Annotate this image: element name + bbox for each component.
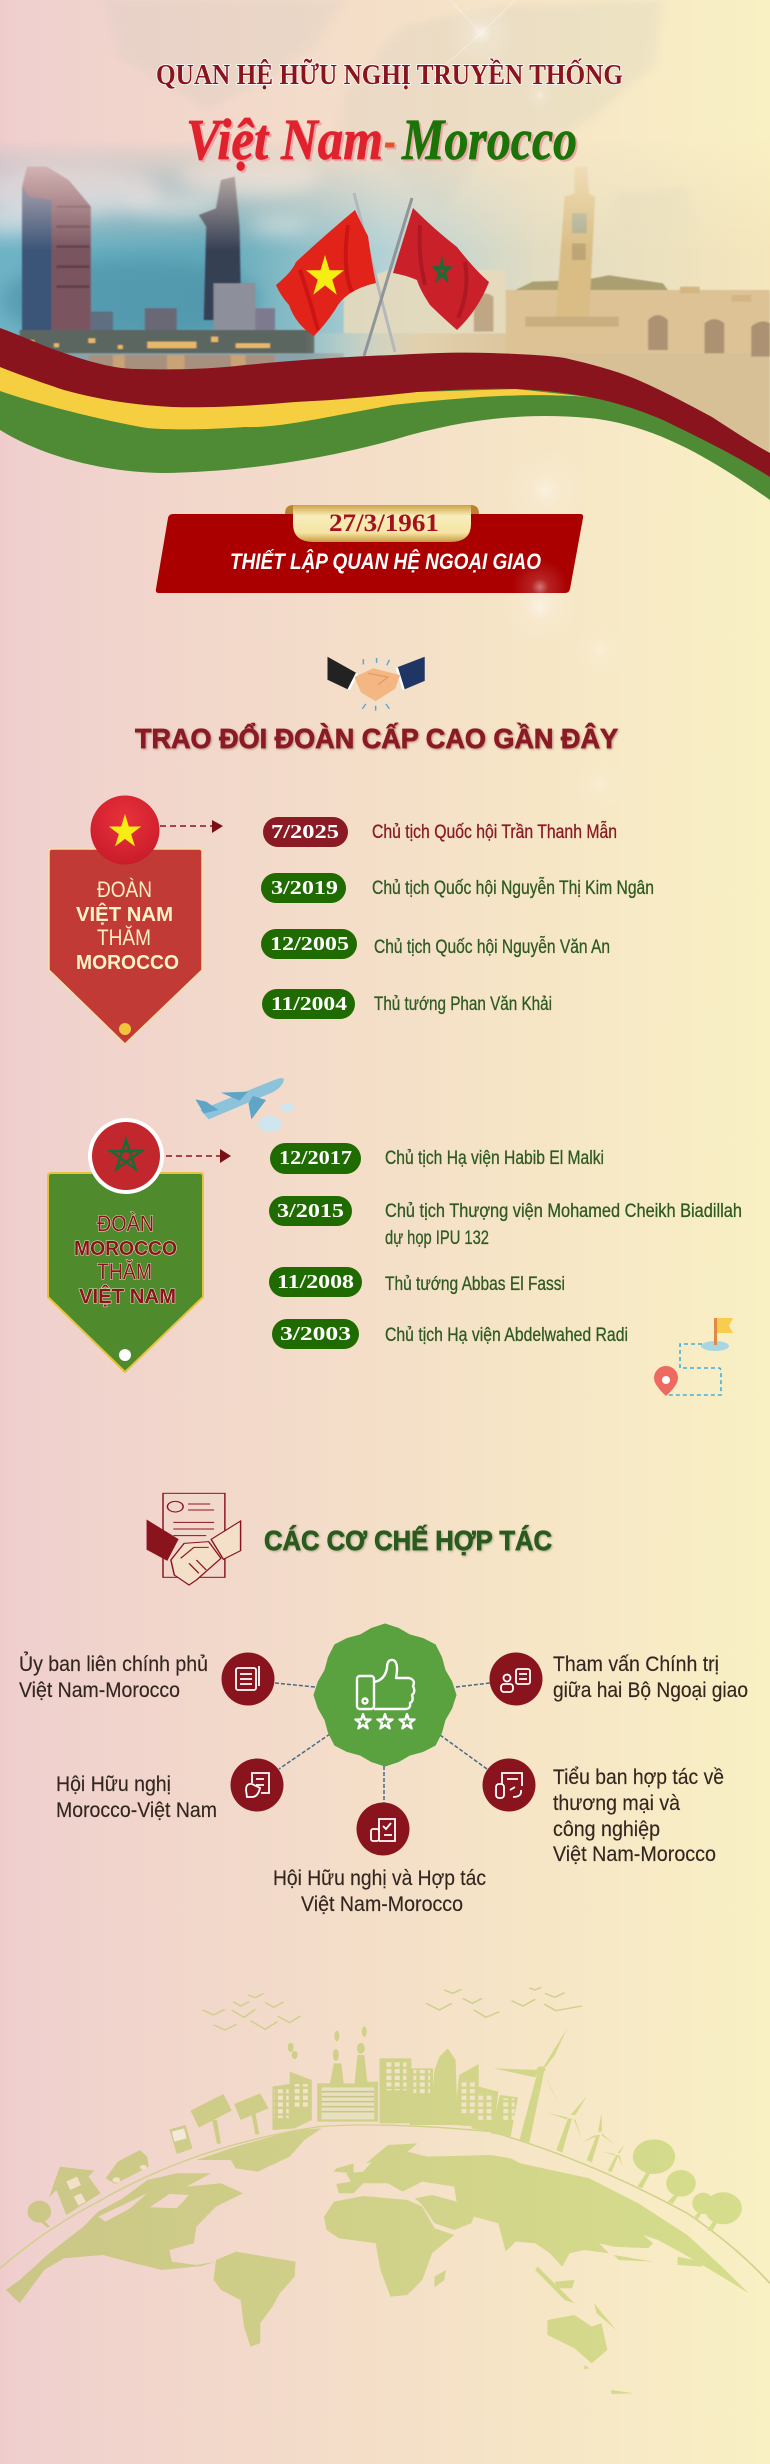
list: Vietnam visits (261, 817, 654, 1019)
sparkle top (440, 0, 556, 111)
row: 3/2015 (269, 1196, 742, 1249)
row: 3/2015: 3/2015 (277, 1200, 344, 1222)
banner red parallelogram (156, 514, 583, 593)
central badge with thumb-up icon (314, 1624, 456, 1766)
pennant text: VIỆT NAM (79, 1284, 176, 1308)
birds (202, 1987, 582, 2030)
row: 11/2004 (262, 989, 552, 1019)
node: friendship and cooperation association (273, 1802, 486, 1916)
row: 12/2017 (270, 1143, 604, 1174)
row: 3/2003: Chủ tịch Hạ viện Abdelwahed Radi (385, 1324, 628, 1346)
row: 7/2025 (263, 817, 617, 847)
pennant dot (119, 1349, 131, 1361)
gold tab (293, 505, 471, 542)
pennant text (76, 877, 179, 974)
flag: Morocco (393, 208, 489, 330)
node: political consultation: giữa hai Bộ Ngoại giao (553, 1679, 748, 1702)
house, car and charger (49, 2125, 192, 2215)
row: 12/2017: 12/2017 (279, 1147, 352, 1169)
pennant text: THĂM (97, 925, 151, 950)
diagram: cooperation mechanisms hub (19, 1624, 748, 1916)
plaza (304, 333, 770, 500)
pennant text: ĐOÀN (97, 877, 152, 902)
panel: Morocco delegation pennant (48, 1118, 231, 1372)
node: political consultation (490, 1652, 748, 1706)
node: trade and industry subcommittee: Tiểu ban hợp tác về (553, 1766, 724, 1789)
pennant text: MOROCCO (76, 952, 179, 974)
left tower (22, 167, 91, 340)
arcade and mosque (344, 270, 506, 333)
icon: agreement document with handshake (147, 1493, 241, 1585)
ribbon (0, 328, 770, 500)
node: political consultation: Tham vấn Chính trị (553, 1653, 719, 1676)
row: 12/2017: Chủ tịch Hạ viện Habib El Malki (385, 1147, 604, 1169)
pennant text: MOROCCO (74, 1238, 177, 1260)
waterfront (20, 330, 314, 355)
continents (6, 2128, 749, 2394)
pennant text (74, 1211, 177, 1308)
node: friendship and cooperation association: Hội Hữu nghị và Hợp tác (273, 1867, 486, 1890)
pennant text: ĐOÀN (97, 1211, 154, 1236)
row: 7/2025: Chủ tịch Quốc hội Trần Thanh Mẫn (372, 820, 617, 843)
dashed connectors (275, 1683, 490, 1803)
row: 11/2008 (269, 1267, 565, 1297)
node: Morocco-Vietnam friendship association: Hội Hữu nghị (56, 1773, 171, 1796)
sparkles below ribbon (500, 445, 630, 815)
globe outline arc (0, 2125, 770, 2283)
illustration: green globe with city, wind turbines and trees (0, 1987, 770, 2394)
pole: Morocco (364, 198, 412, 356)
row: 11/2004: Thủ tướng Phan Văn Khải (374, 993, 552, 1015)
pennant shape (48, 1173, 203, 1372)
row: 11/2008: Thủ tướng Abbas El Fassi (385, 1273, 565, 1295)
row: 3/2015: dự họp IPU 132 (385, 1227, 489, 1249)
city skyline (273, 2048, 518, 2137)
heading: exchange of high-level delegations: TRAO ĐỔI ĐOÀN CẤP CAO GẦN ĐÂY (135, 723, 618, 754)
node: Morocco-Vietnam friendship association (56, 1758, 284, 1822)
header photo: city skyline and mosque (0, 146, 770, 453)
node: trade and industry subcommittee: thương mại và (553, 1792, 680, 1815)
faint world map behind header (103, 0, 700, 253)
date text: 27/3/1961 (329, 510, 439, 537)
node: Morocco-Vietnam friendship association: Morocco-Việt Nam (56, 1799, 217, 1822)
date banner (156, 505, 583, 615)
title line 2: Morocco (401, 107, 577, 172)
ribbon band: dark red (0, 328, 770, 477)
row: 3/2003: 3/2003 (280, 1323, 351, 1345)
heading: cooperation mechanisms: CÁC CƠ CHẾ HỢP TÁC (264, 1525, 552, 1556)
smokestack puffs (288, 2026, 367, 2061)
pennant shape (49, 849, 202, 1044)
row: 12/2005: 12/2005 (270, 933, 349, 955)
node: intergovernmental committee: Ủy ban liên chính phủ (19, 1652, 208, 1676)
pole: Vietnam (354, 193, 395, 352)
icon: route with flag and pin (654, 1318, 733, 1396)
node: trade and industry subcommittee: Việt Nam-Morocco (553, 1843, 716, 1866)
row: 3/2003 (272, 1319, 628, 1349)
Bitexco tower (199, 177, 241, 320)
icon: handshake (327, 657, 425, 711)
node: trade and industry subcommittee: công nghiệp (553, 1818, 660, 1841)
node: friendship and cooperation association: Việt Nam-Morocco (301, 1893, 463, 1916)
row: 11/2004: 11/2004 (271, 993, 347, 1015)
wind turbines (493, 2028, 625, 2172)
flag: Vietnam (276, 210, 376, 336)
row: 3/2019 (261, 873, 654, 903)
list: Morocco visits (269, 1143, 742, 1349)
icon: airplane (195, 1078, 294, 1132)
row: 7/2025: 7/2025 (271, 821, 339, 843)
node: trade and industry subcommittee (482, 1758, 724, 1866)
arrow (166, 1149, 231, 1163)
row: 11/2008: 11/2008 (277, 1271, 354, 1293)
pennant text: VIỆT NAM (76, 902, 173, 926)
banner caption: THIẾT LẬP QUAN HỆ NGOẠI GIAO (230, 549, 541, 574)
title line 1: QUAN HỆ HỮU NGHỊ TRUYỀN THỐNG (156, 57, 623, 91)
arrow (160, 820, 223, 833)
node: intergovernmental committee (19, 1652, 274, 1706)
row: 3/2019: 3/2019 (271, 877, 338, 899)
title line 2 (186, 107, 577, 172)
flag circle (90, 796, 160, 864)
flags with crossed poles (276, 193, 489, 356)
node: intergovernmental committee: Việt Nam-Morocco (19, 1679, 180, 1702)
title line 2: Việt Nam (186, 107, 383, 172)
row: 3/2019: Chủ tịch Quốc hội Nguyễn Thị Kim Ngân (372, 876, 654, 899)
pennant text: THĂM (97, 1259, 152, 1284)
gold tab back (285, 505, 479, 514)
flag circle (88, 1118, 164, 1194)
banner shine (512, 559, 568, 615)
panel: Vietnam delegation pennant (49, 796, 223, 1044)
pennant dot (119, 1023, 131, 1035)
row: 12/2005: Chủ tịch Quốc hội Nguyễn Văn An (374, 935, 610, 958)
ribbon band: green (0, 384, 770, 500)
title line 2: - (384, 107, 396, 172)
solar panels (191, 2093, 269, 2144)
ribbon band: yellow (0, 367, 589, 429)
trees (27, 2139, 742, 2232)
row: 12/2005 (261, 929, 610, 959)
